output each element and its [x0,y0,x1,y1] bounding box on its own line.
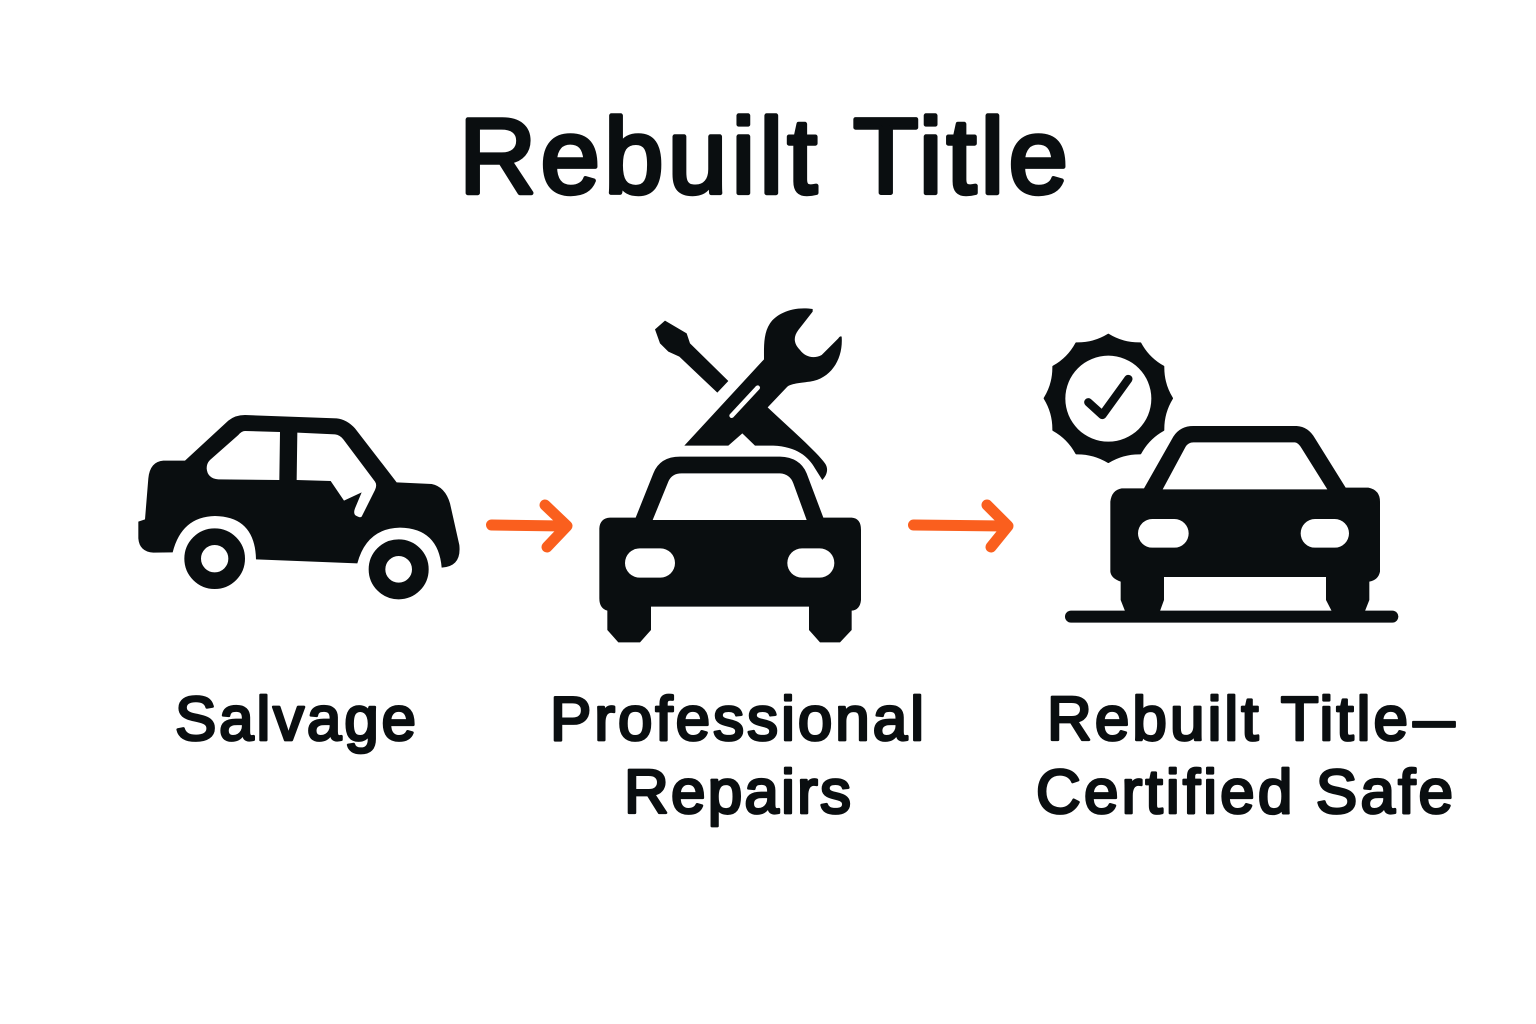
icon: salvage car with damaged door [138,415,460,591]
icon: car with wrench and screwdriver [599,308,861,642]
arrow: repairs to rebuilt title [914,505,1008,547]
label: professional repairs: Professional [550,685,924,754]
label: salvage: Salvage [175,685,416,754]
label: rebuilt title certified safe [1036,685,1455,827]
icon: certified car with badge [1045,335,1398,623]
label: rebuilt title certified safe: Certified Safe [1036,758,1453,827]
label: professional repairs [550,685,924,827]
label: rebuilt title certified safe: — [1413,685,1455,754]
title: Rebuilt Title [459,96,1068,216]
arrow: salvage to repairs [492,505,567,547]
label: professional repairs: Repairs [624,758,851,827]
label: rebuilt title certified safe: Rebuilt Title [1047,685,1408,754]
